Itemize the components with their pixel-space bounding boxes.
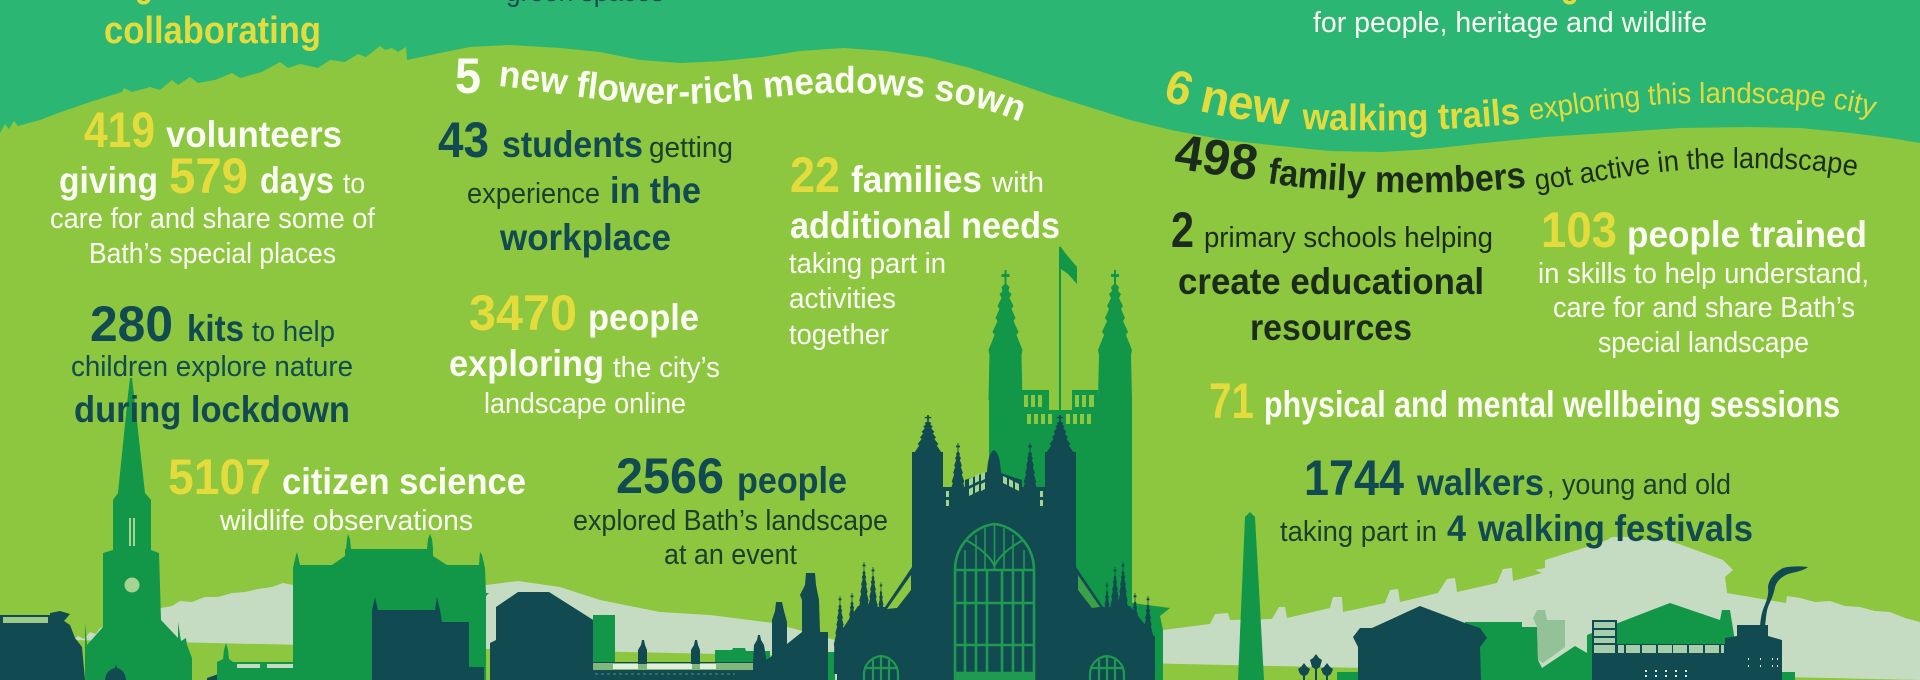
stat: primary schools: create educational xyxy=(1178,261,1484,302)
stat: walkers xyxy=(1280,450,1753,549)
stat: students: students xyxy=(502,124,643,165)
stat: people trained: 103 xyxy=(1541,202,1617,258)
skyline: abbey great west window xyxy=(955,524,1034,680)
skyline: bridge balustrade and statues xyxy=(593,573,835,680)
heading: walking trails: walking trails xyxy=(1302,98,1519,138)
stat: walkers: , young and old xyxy=(1547,469,1731,501)
stat: primary schools: primary schools helping xyxy=(1204,222,1493,254)
heading: meadows: new flower-rich meadows sown xyxy=(500,66,1024,121)
stat: volunteers: care for and share some of xyxy=(50,203,376,235)
stat: walkers: walkers xyxy=(1416,462,1544,503)
stat: wellbeing sessions: 71 xyxy=(1209,373,1254,429)
stat: online explorers: 3470 xyxy=(469,285,577,341)
stat: walkers: walking festivals xyxy=(1477,508,1753,549)
stat: family members: 498 xyxy=(1174,136,1257,180)
skyline: right green low block xyxy=(1782,672,1795,680)
stat: volunteers: 579 xyxy=(169,148,248,204)
stat: walkers: taking part in xyxy=(1280,516,1437,548)
stat: volunteers: days xyxy=(260,160,334,201)
stat: citizen science: 5107 xyxy=(168,449,271,505)
stat: nature kits: during lockdown xyxy=(74,389,350,430)
stat: people trained xyxy=(1538,202,1869,359)
skyline: abbey tower (mid green) xyxy=(988,246,1170,680)
stat: event visitors xyxy=(573,448,888,571)
stat: primary schools xyxy=(1171,202,1493,348)
stat: students: 43 xyxy=(438,112,489,168)
stat: event visitors: people xyxy=(737,460,847,501)
stat: nature kits xyxy=(71,296,353,430)
skyline: pale-green tower fragment xyxy=(1533,610,1565,663)
skyline: street lamps xyxy=(1298,654,1333,680)
stat: nature kits: kits xyxy=(187,308,244,349)
stat: event visitors: 2566 xyxy=(616,448,724,504)
skyline: chimney smoke xyxy=(1760,566,1808,626)
skyline: small domes xyxy=(105,662,372,680)
stat: families: taking part in xyxy=(789,248,946,280)
stat: event visitors: at an event xyxy=(664,539,797,571)
skyline: dark hipped-roof building xyxy=(490,592,598,680)
stat: volunteers: volunteers xyxy=(166,114,342,155)
stat: people trained: in skills to help understand, xyxy=(1538,258,1869,290)
stat: students: in the xyxy=(610,170,701,211)
stat: nature kits: children explore nature xyxy=(71,351,353,383)
stat: families: activities xyxy=(789,283,896,315)
text: collaborating: collaborating xyxy=(104,10,321,52)
stat: families: additional needs xyxy=(790,205,1060,246)
top cut-off text xyxy=(104,0,1707,52)
skyline: abbey front (dark) xyxy=(834,415,1155,680)
stat: online explorers: people xyxy=(588,297,699,338)
stat: citizen science: wildlife observations xyxy=(219,505,473,537)
text: for people, heritage and wildlife: for people, heritage and wildlife xyxy=(1313,7,1707,39)
skyline: left dark building with balustrade xyxy=(0,611,85,680)
stat: families xyxy=(789,147,1060,351)
skyline: pale distant hills and terraces xyxy=(73,537,1920,680)
heading: walking trails xyxy=(1166,71,1878,138)
stat: online explorers xyxy=(449,285,720,420)
heading: walking trails: exploring this landscape city xyxy=(1530,82,1878,122)
stat: students: workplace xyxy=(499,217,671,258)
skyline: left church spire xyxy=(85,378,192,680)
stat: citizen science xyxy=(168,449,526,537)
stat: family members: family members xyxy=(1270,158,1525,198)
skyline: modern green roof xyxy=(1587,603,1735,680)
stat: volunteers: Bath’s special places xyxy=(89,238,336,270)
stat: online explorers: the city’s xyxy=(613,352,720,384)
skyline: obelisk xyxy=(1238,512,1264,680)
stat: walkers: 4 xyxy=(1447,508,1466,549)
skyline: right dark temple building xyxy=(1353,606,1487,680)
stat: people trained: people trained xyxy=(1627,214,1867,255)
stat: families: with xyxy=(991,167,1044,199)
stat: students: experience xyxy=(467,178,600,210)
stat: volunteers: giving xyxy=(59,160,158,201)
skyline: green block behind xyxy=(593,615,615,680)
stat: online explorers: landscape online xyxy=(484,388,686,420)
stat: families: families xyxy=(851,159,982,200)
skyline: abbey small arched windows xyxy=(864,656,1124,680)
stat: families: together xyxy=(789,319,889,351)
stat: people trained: special landscape xyxy=(1598,327,1809,359)
stat: volunteers: 419 xyxy=(84,102,155,158)
stat: students xyxy=(438,112,733,258)
heading: walking trails: 6 new xyxy=(1166,71,1290,124)
heading: meadows: 5 xyxy=(455,48,481,104)
stat: primary schools: 2 xyxy=(1171,202,1194,258)
stat: online explorers: exploring xyxy=(449,343,604,384)
stat: nature kits: 280 xyxy=(90,296,173,352)
skyline: right green blocks xyxy=(1337,622,1587,680)
skyline xyxy=(0,246,1920,680)
skyline: abbey window base xyxy=(955,673,1034,680)
stat: students: getting xyxy=(649,132,733,164)
stat: event visitors: explored Bath’s landscape xyxy=(573,505,888,537)
skyline: modern glass building xyxy=(1592,620,1782,680)
stat: family members xyxy=(1174,136,1857,198)
stat: families: 22 xyxy=(790,147,840,203)
skyline: small domed green building xyxy=(217,643,293,680)
stat: wellbeing sessions xyxy=(1209,373,1840,429)
stat: family members: got active in the landscape xyxy=(1536,147,1857,196)
skyline: Georgian mid-green building xyxy=(293,534,489,680)
stat: walkers: 1744 xyxy=(1304,450,1404,506)
stat: volunteers: to xyxy=(343,168,365,200)
stat: volunteers xyxy=(50,102,376,270)
skyline: dark central building xyxy=(372,597,484,680)
stat: citizen science: citizen science xyxy=(282,461,526,502)
stat: people trained: care for and share Bath’s xyxy=(1553,292,1855,324)
stat: primary schools: resources xyxy=(1250,307,1412,348)
stat: nature kits: to help xyxy=(252,316,335,348)
